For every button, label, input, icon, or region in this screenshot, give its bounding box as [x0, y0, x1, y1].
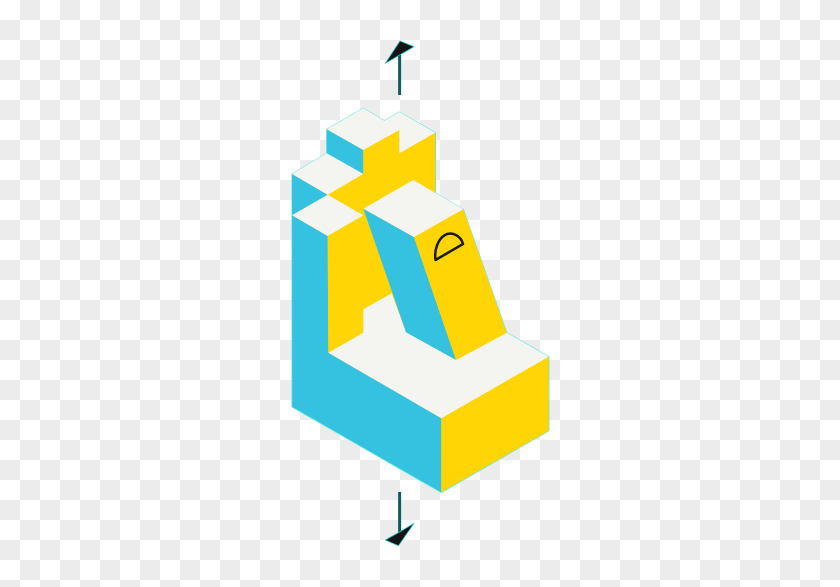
front step diamond — [292, 195, 363, 236]
left step surface — [292, 153, 363, 195]
yellow back wall — [328, 130, 435, 215]
blue slope face — [363, 209, 456, 360]
icon: half circle — [435, 234, 463, 260]
yellow inner wall — [328, 209, 395, 353]
slope top surface — [363, 180, 463, 237]
yellow slope face — [414, 209, 507, 360]
arrow: up — [385, 41, 414, 95]
base top surface — [328, 293, 549, 418]
blue front wall — [292, 174, 441, 492]
blue upper step wall — [327, 129, 363, 174]
isometric block figure — [292, 108, 549, 493]
arrow: down — [385, 492, 414, 546]
top cube surface — [327, 108, 435, 153]
yellow right face of base — [441, 357, 549, 492]
cyan edge highlight — [292, 108, 549, 493]
white top surfaces — [292, 108, 549, 418]
